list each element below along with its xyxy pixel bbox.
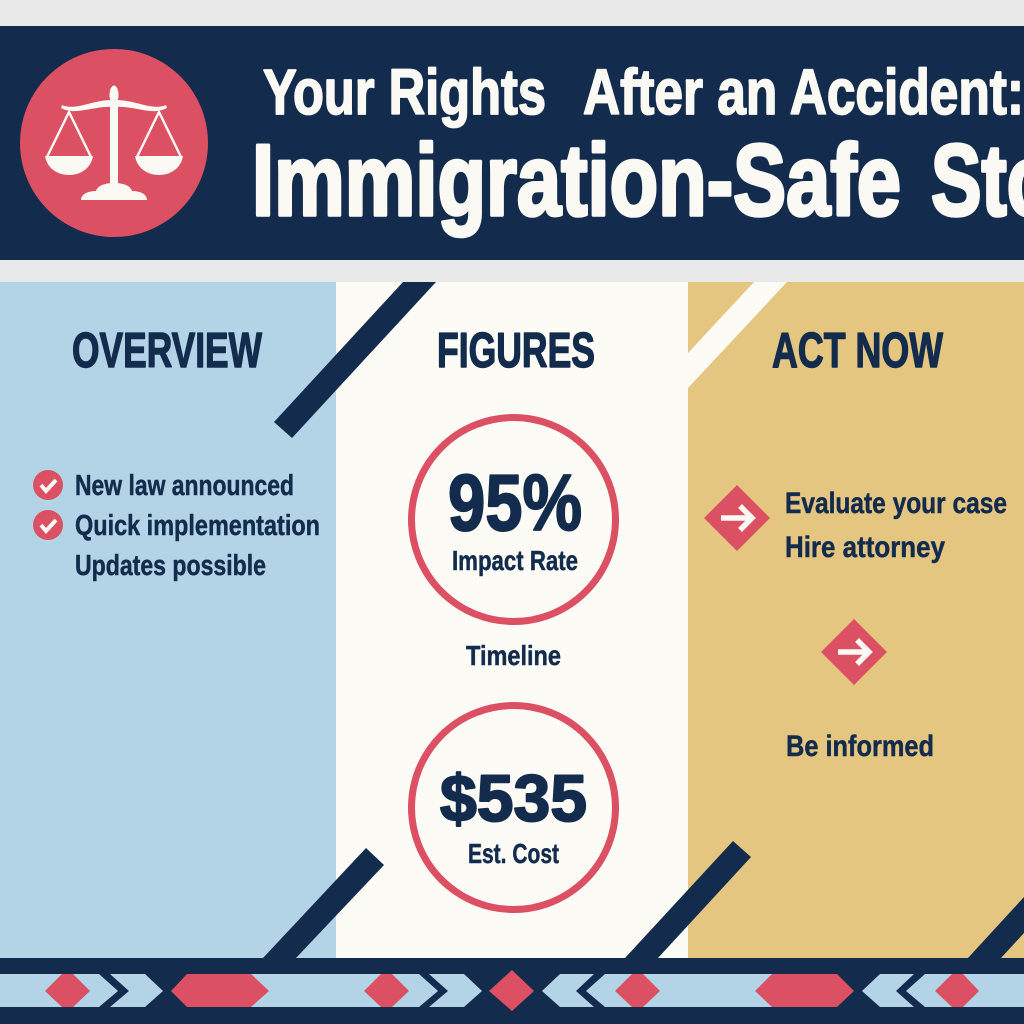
icon: check two	[33, 510, 63, 540]
list item: new law: New law announced	[75, 470, 294, 502]
icon: arrow diamond one	[704, 485, 770, 551]
action: hire: Hire attorney	[785, 531, 945, 564]
label: timeline: Timeline	[466, 640, 561, 671]
stat circle: estimated cost: Est. Cost	[468, 838, 559, 869]
heading: act now: ACT NOW	[772, 324, 944, 378]
panel: act now	[688, 282, 1024, 958]
icon: check one	[33, 470, 63, 500]
icon: arrow diamond two	[821, 619, 887, 685]
panel: header banner	[0, 26, 1024, 260]
diagonal accents	[263, 282, 1024, 958]
stat circle: impact rate	[412, 418, 616, 622]
title line one: Your Rights	[263, 56, 546, 128]
stat circle: impact rate: 95%	[448, 458, 582, 547]
title line one	[263, 56, 1024, 128]
icon: scales of justice badge	[20, 49, 208, 237]
list item: updates: Updates possible	[75, 550, 266, 582]
heading: figures: FIGURES	[437, 324, 595, 378]
stat circle: impact rate: Impact Rate	[452, 545, 578, 576]
checklist	[33, 470, 320, 582]
list item: implementation: Quick implementation	[75, 510, 320, 542]
stat circle: estimated cost: $535	[440, 761, 587, 835]
decorative footer band	[0, 958, 1024, 1024]
panel: overview	[0, 282, 336, 958]
stat circle: estimated cost	[412, 706, 616, 910]
heading: overview: OVERVIEW	[72, 324, 263, 378]
action: be informed: Be informed	[786, 730, 934, 763]
panel: figures	[336, 282, 688, 958]
